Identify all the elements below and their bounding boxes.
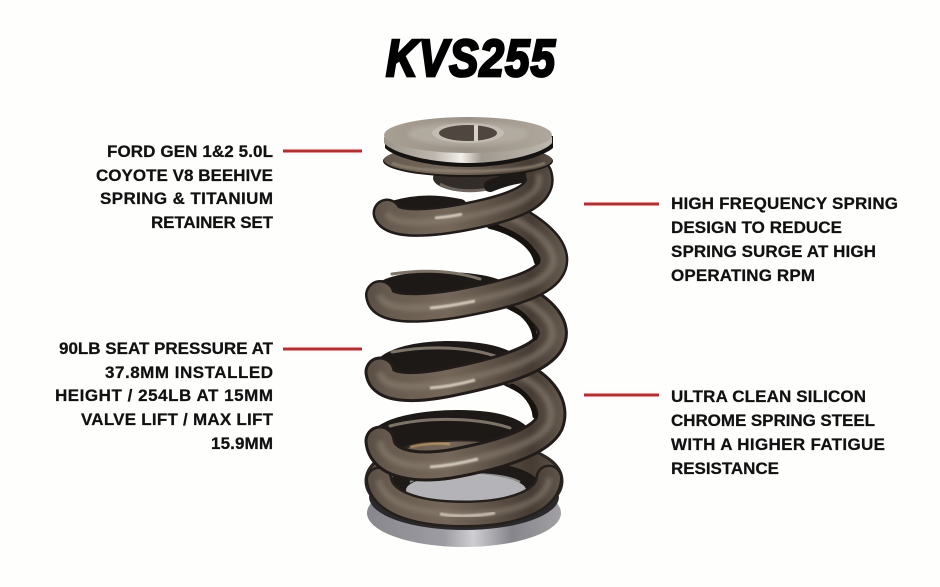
coil 3 (380, 216, 553, 308)
coil 5 (380, 372, 551, 467)
callout: seat pressure and lift: 37.8MM INSTALLED (105, 363, 273, 382)
callout: silicon chrome steel: WITH A HIGHER FATIGUE (671, 435, 885, 454)
title: KVS255 (386, 31, 556, 88)
callout: seat pressure and lift: 90LB SEAT PRESSURE AT (59, 339, 274, 358)
callout: Ford Gen 1&2 fitment: COYOTE V8 BEEHIVE (96, 166, 273, 185)
coil 4 (380, 294, 552, 388)
callout: Ford Gen 1&2 fitment: SPRING & TITANIUM (100, 189, 273, 208)
bottom coil seat (376, 452, 553, 516)
callout: high frequency design: OPERATING RPM (671, 266, 815, 285)
callout: Ford Gen 1&2 fitment: RETAINER SET (151, 213, 274, 232)
callout: Ford Gen 1&2 fitment (96, 142, 362, 232)
callout: high frequency design (584, 194, 898, 285)
callout: silicon chrome steel: RESISTANCE (671, 459, 779, 478)
base plate (367, 464, 561, 547)
callout: high frequency design: DESIGN TO REDUCE (671, 218, 842, 237)
callout: high frequency design: SPRING SURGE AT HIGH (671, 242, 876, 261)
callout: silicon chrome steel: ULTRA CLEAN SILICON (671, 387, 866, 406)
retainer underside (433, 164, 505, 192)
valve spring and titanium retainer photo (367, 117, 561, 547)
titanium retainer (384, 117, 553, 167)
callout: seat pressure and lift: 15.9MM (211, 434, 273, 453)
callout: seat pressure and lift (55, 339, 362, 453)
callout: seat pressure and lift: HEIGHT / 254LB AT 15MM (55, 386, 273, 405)
callout: silicon chrome steel (584, 387, 885, 478)
top coil flange (383, 145, 553, 177)
callout: seat pressure and lift: VALVE LIFT / MAX LIFT (81, 410, 274, 429)
callout: Ford Gen 1&2 fitment: FORD GEN 1&2 5.0L (107, 142, 273, 161)
callout: silicon chrome steel: CHROME SPRING STEEL (671, 411, 875, 430)
callout: high frequency design: HIGH FREQUENCY SPRING (671, 194, 898, 213)
coil 2 (387, 174, 545, 222)
